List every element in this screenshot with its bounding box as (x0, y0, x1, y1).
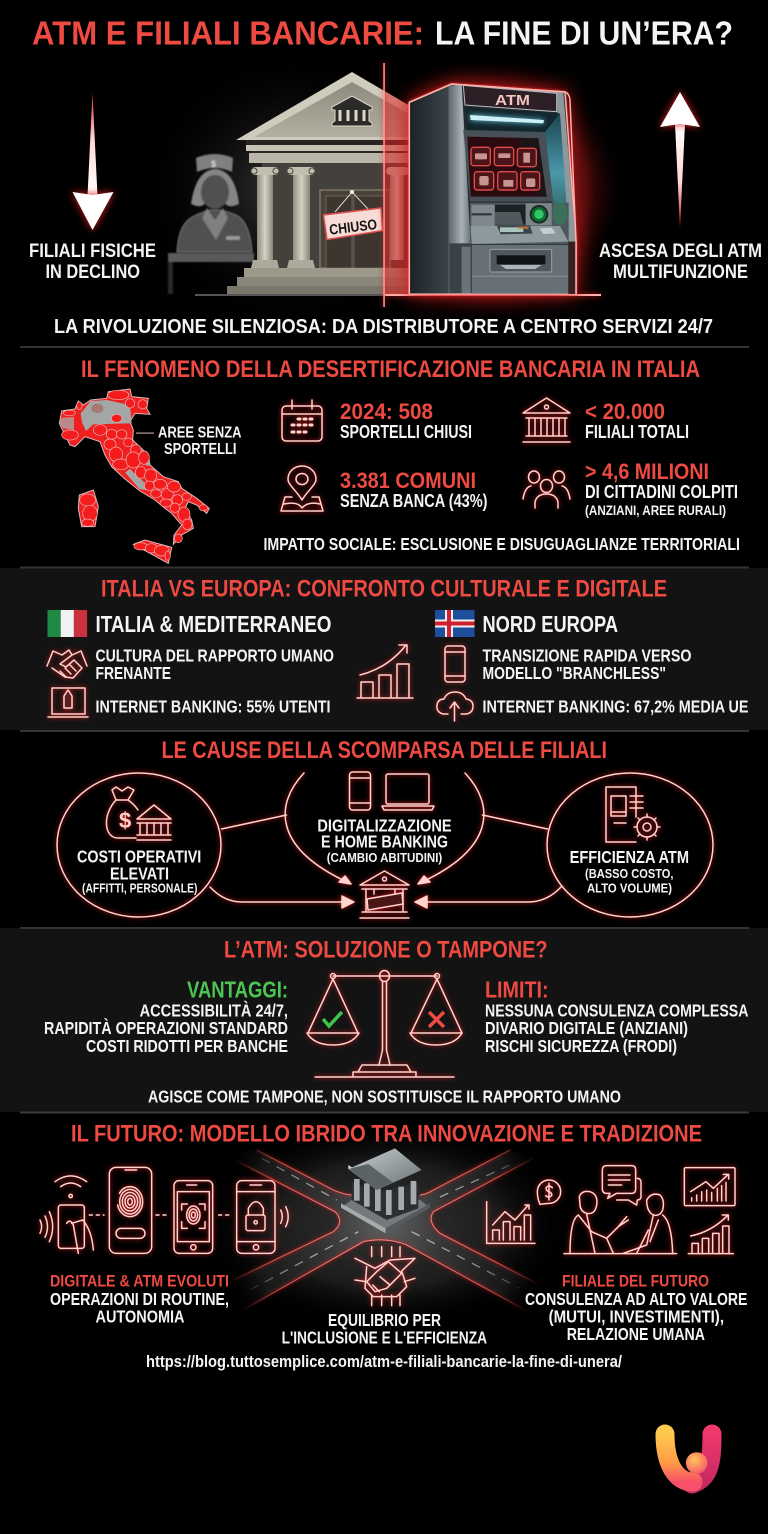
text: advantages (44, 976, 288, 1056)
text: human relationship culture: CULTURA DEL RAPPORTO UMANO (96, 646, 334, 666)
text: branchless transition: MODELLO "BRANCHLESS" (482, 663, 666, 683)
subtitle: LA RIVOLUZIONE SILENZIOSA: DA DISTRIBUTORE A CENTRO SERVIZI 24/7 (54, 316, 713, 338)
stat: closed counters (282, 399, 472, 442)
text: advantages: VANTAGGI: (187, 976, 288, 1002)
text: limits: RISCHI SICUREZZA (FRODI) (485, 1036, 677, 1056)
text: digitalization: (CAMBIO ABITUDINI) (327, 850, 442, 865)
columns (251, 167, 409, 268)
text: ATMs rising (599, 240, 762, 283)
text: branches declining: FILIALI FISICHE (29, 240, 156, 262)
map callout (136, 424, 242, 458)
icon: faded bank teller (168, 154, 254, 294)
text: high operating costs: ELEVATI (110, 863, 169, 883)
text: human relationship culture (96, 646, 334, 683)
text: branch of the future: (MUTUI, INVESTIMENTI), (549, 1307, 724, 1327)
stat: closed counters: 2024: 508 (340, 399, 433, 424)
text: Italy column heading: ITALIA & MEDITERRANEO (96, 611, 332, 637)
icon: people (523, 471, 570, 508)
text: branch of the future: RELAZIONE UMANA (567, 1324, 705, 1344)
icon: logo (665, 1434, 712, 1484)
icon: map pin (281, 466, 323, 511)
text: limits (485, 976, 749, 1056)
divider line (383, 63, 385, 307)
text: digital and ATM (50, 1272, 229, 1327)
icon: money bag and bank: $ (119, 808, 131, 833)
red overlay on the right side of the bank (384, 91, 409, 295)
heading: L’ATM: SOLUZIONE O TAMPONE? (224, 936, 548, 963)
icon: phone and laptop (350, 772, 434, 810)
icon: advisory branch (487, 1166, 735, 1254)
text: branch of the future (525, 1272, 747, 1344)
heading: LE CAUSE DELLA SCOMPARSA DELLE FILIALI (162, 737, 607, 764)
text: limits: LIMITI: (485, 976, 549, 1002)
icon: 3D bank (341, 1148, 430, 1233)
text: conclusion: AGISCE COME TAMPONE, NON SOSTITUISCE IL RAPPORTO UMANO (148, 1087, 621, 1107)
panel: hero bank versus ATM (29, 50, 762, 338)
text: advantages: ACCESSIBILITÀ 24/7, (140, 1000, 288, 1021)
text: ATM sign: ATM (495, 92, 530, 109)
text: digitalization (317, 816, 452, 865)
text: digitalization: DIGITALIZZAZIONE (317, 816, 452, 836)
icon: phone with fingerprint (109, 1167, 169, 1253)
stat: municipalities without a bank: 3.381 COMUNI (340, 468, 476, 493)
icon: small growth chart (688, 1215, 733, 1254)
panel: ATM solution or stopgap (0, 927, 768, 1112)
roads crossing (198, 1122, 572, 1328)
icon: Italian flag (48, 610, 87, 637)
text: branches declining: IN DECLINO (46, 261, 140, 283)
icon: Iceland flag (435, 610, 474, 637)
text: high operating costs: COSTI OPERATIVI (77, 846, 201, 866)
icon: money bag and bank (106, 787, 171, 840)
text: ATM efficiency (570, 847, 689, 896)
text: human relationship culture: FRENANTE (96, 663, 171, 683)
icon: dollar bubble (537, 1180, 561, 1204)
text: balance: EQUILIBRIO PER (328, 1310, 441, 1330)
diagram: circles and arrows (57, 773, 713, 917)
icon: closed bank (360, 871, 409, 918)
stat: citizens affected: > 4,6 MILIONI (585, 459, 709, 484)
icon: ATM and gear (606, 787, 660, 842)
stat: total branches: < 20.000 (585, 399, 665, 424)
icon: calendar (282, 400, 322, 441)
panel: Italy versus Europe (0, 566, 768, 730)
icon: ATM machine (409, 84, 576, 294)
panel: causes of branch closures (57, 737, 713, 918)
text: digitalization: E HOME BANKING (321, 832, 448, 852)
text: high operating costs: (AFFITTI, PERSONALE) (82, 882, 197, 896)
title: LA FINE DI UN’ERA? (435, 14, 733, 52)
map callout: AREE SENZA (158, 424, 242, 442)
text: branchless transition: TRANSIZIONE RAPIDA VERSO (482, 646, 692, 666)
stat: total branches: FILIALI TOTALI (585, 422, 689, 442)
stat: total branches (523, 398, 689, 442)
ground line (195, 294, 601, 296)
icon: bank (523, 398, 570, 442)
stat: closed counters: SPORTELLI CHIUSI (340, 422, 472, 442)
text: ATM efficiency: EFFICIENZA ATM (570, 847, 689, 867)
icon: handshake chip (355, 1247, 415, 1306)
text: balance: L'INCLUSIONE E L'EFFICIENZA (282, 1327, 487, 1347)
text: balance (282, 1310, 487, 1347)
icon: phone with lock (237, 1181, 288, 1253)
text: branches declining (29, 240, 156, 283)
text: advantages: RAPIDITÀ OPERAZIONI STANDARD (44, 1017, 288, 1038)
title: ATM E FILIALI BANCARIE: (32, 14, 424, 52)
map callout: SPORTELLI (164, 441, 236, 458)
arrow: branches declining (72, 92, 114, 230)
icon: cloud upload (437, 692, 473, 721)
icon: speech bubbles (602, 1166, 641, 1205)
icon: two people talking (564, 1191, 677, 1254)
icon: framed chart (684, 1168, 735, 1206)
stat: citizens affected: (ANZIANI, AREE RURALI) (585, 502, 726, 518)
stat: citizens affected (523, 459, 738, 518)
text: ATMs rising: MULTIFUNZIONE (613, 261, 748, 283)
icon: smartphone (445, 646, 465, 682)
text: Italy internet banking: INTERNET BANKING: 55% UTENTI (96, 697, 330, 717)
icon: laptop (48, 688, 88, 717)
text: digital and ATM: DIGITALE & ATM EVOLUTI (50, 1272, 229, 1291)
text: branchless transition (482, 646, 692, 683)
text: limits: DIVARIO DIGITALE (ANZIANI) (485, 1018, 688, 1038)
title (32, 14, 733, 52)
text: high operating costs (77, 846, 201, 896)
icon: growth chart (357, 645, 413, 698)
icon: handshake (47, 650, 87, 678)
icon: phone with fingerprint scanner (174, 1181, 232, 1253)
text: ATM efficiency: ALTO VOLUME) (587, 880, 672, 896)
stat: citizens affected: DI CITTADINI COLPITI (585, 482, 738, 502)
text: digital and ATM: OPERAZIONI DI ROUTINE, (50, 1289, 229, 1309)
icon: green check (323, 1012, 342, 1026)
panel: bank desertification in Italy (59, 356, 740, 563)
icon: card and hand (40, 1176, 104, 1253)
panel: hybrid future model (20, 1112, 749, 1371)
text: digital and ATM: AUTONOMIA (96, 1307, 185, 1327)
door with sign (320, 190, 390, 268)
stat: municipalities without a bank: SENZA BANCA (43%) (340, 491, 488, 511)
text: branch of the future: FILIALE DEL FUTURO (562, 1272, 709, 1291)
icon: digital banking phones (40, 1167, 288, 1253)
text: Nordic column heading: NORD EUROPA (482, 611, 618, 637)
stat: municipalities without a bank (281, 466, 488, 511)
text: advantages: COSTI RIDOTTI PER BANCHE (86, 1036, 288, 1056)
icon: closed bank building (227, 72, 468, 294)
text: ATM efficiency: (BASSO COSTO, (585, 866, 674, 881)
icon: red cross (429, 1012, 444, 1027)
text: source URL: https://blog.tuttosemplice.com/atm-e-filiali-bancarie-la-fine-di-unera/ (146, 1353, 622, 1371)
door with sign: CHIUSO (328, 217, 378, 239)
icon: rising chart (487, 1202, 535, 1243)
icon: faded bank teller: $ (211, 159, 216, 169)
map of Italy (59, 389, 209, 563)
arrow: ATMs rising (660, 92, 700, 228)
icon: balance scale (307, 970, 462, 1077)
